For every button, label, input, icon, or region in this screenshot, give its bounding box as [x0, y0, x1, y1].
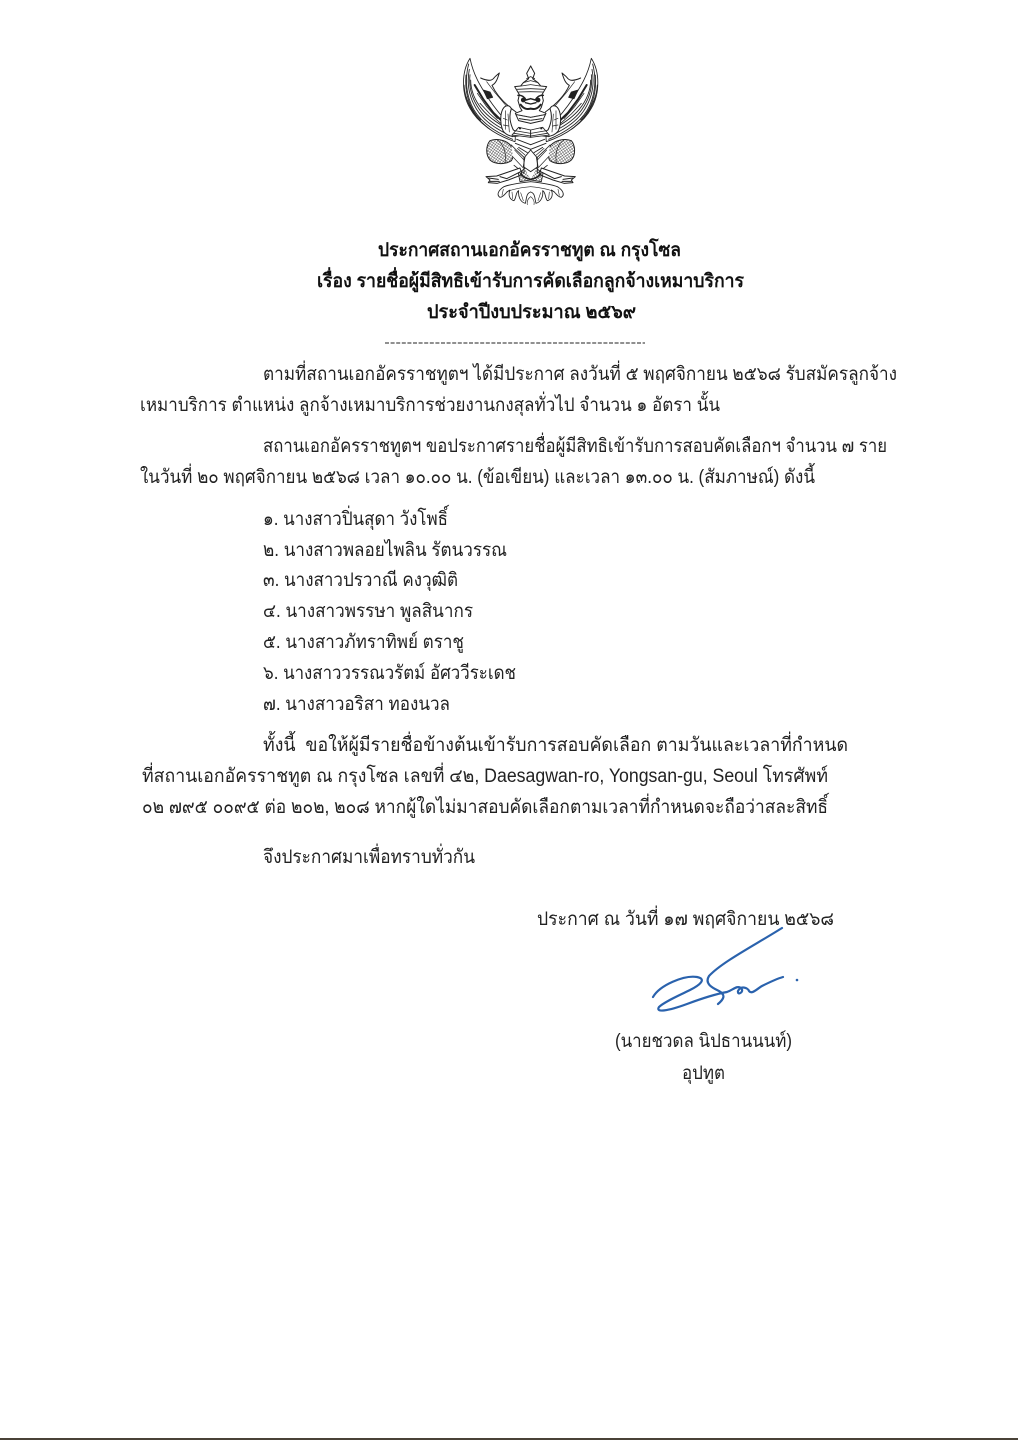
paragraph: announcement reference [140, 360, 897, 417]
dashed divider [385, 342, 645, 344]
signature [653, 928, 798, 1011]
list of candidates: ๑. นางสาวปิ่นสุดา วังโพธิ์ [263, 504, 450, 531]
signatory title: อุปทูต [682, 1063, 725, 1085]
paragraph: exam schedule: ในวันที่ ๒๐ พฤศจิกายน ๒๕๖๘ เวลา ๑๐.๐๐ น. (ข้อเขียน) และเวลา ๑๓.๐๐ น. (สัมภาษณ์) ดังนี้ [140, 463, 815, 488]
title: ประจำปีงบประมาณ ๒๕๖๙ [427, 301, 636, 323]
closing statement: จึงประกาศมาเพื่อทราบทั่วกัน [263, 843, 475, 868]
list of candidates: ๓. นางสาวปรวาณี คงวุฒิติ [263, 569, 458, 592]
title: เรื่อง รายชื่อผู้มีสิทธิเข้ารับการคัดเลือกลูกจ้างเหมาบริการ [317, 267, 745, 293]
list of candidates: ๖. นางสาววรรณวรัตม์ อัศววีระเดช [263, 662, 516, 684]
announcement date: ประกาศ ณ วันที่ ๑๗ พฤศจิกายน ๒๕๖๘ [537, 905, 834, 930]
paragraph: exam schedule [140, 432, 887, 488]
emblem: Garuda [463, 58, 598, 205]
paragraph: exam location and conditions [142, 731, 848, 818]
list of candidates: ๒. นางสาวพลอยไพลิน รัตนวรรณ [263, 539, 507, 561]
title: ประกาศสถานเอกอัครราชทูต ณ กรุงโซล [378, 238, 681, 262]
paragraph: exam location and conditions: ทั้งนี้ ขอให้ผู้มีรายชื่อข้างต้นเข้ารับการสอบคัดเลือก ตามวันและเวลาที่กำหนด [263, 731, 848, 756]
list of candidates [263, 504, 516, 715]
paragraph: announcement reference: เหมาบริการ ตำแหน่ง ลูกจ้างเหมาบริการช่วยงานกงสุลทั่วไป จำนวน ๑ อัตรา นั้น [140, 391, 720, 417]
paragraph: exam schedule: สถานเอกอัครราชทูตฯ ขอประกาศรายชื่อผู้มีสิทธิเข้ารับการสอบคัดเลือกฯ จำนวน ๗ ราย [263, 432, 887, 457]
list of candidates: ๔. นางสาวพรรษา พูลสินากร [263, 601, 473, 622]
list of candidates: ๗. นางสาวอริสา ทองนวล [263, 694, 450, 715]
paragraph: exam location and conditions: ที่สถานเอกอัครราชทูต ณ กรุงโซล เลขที่ ๔๒, Daesagwan-ro, Yongsan-gu, Seoul โทรศัพท์ [142, 762, 828, 788]
paragraph: announcement reference: ตามที่สถานเอกอัครราชทูตฯ ได้มีประกาศ ลงวันที่ ๕ พฤศจิกายน ๒๕๖๘ รับสมัครลูกจ้าง [263, 360, 897, 385]
bottom scan edge [0, 1438, 1018, 1440]
list of candidates: ๕. นางสาวภัทราทิพย์ ตราชู [263, 631, 464, 653]
title [317, 238, 745, 323]
signatory name: (นายชวดล นิปธานนนท์) [615, 1030, 792, 1052]
paragraph: exam location and conditions: ๐๒ ๗๙๕ ๐๐๙๕ ต่อ ๒๐๒, ๒๐๘ หากผู้ใดไม่มาสอบคัดเลือกตามเวลาที่กำหนดจะถือว่าสละสิทธิ์ [142, 792, 830, 818]
